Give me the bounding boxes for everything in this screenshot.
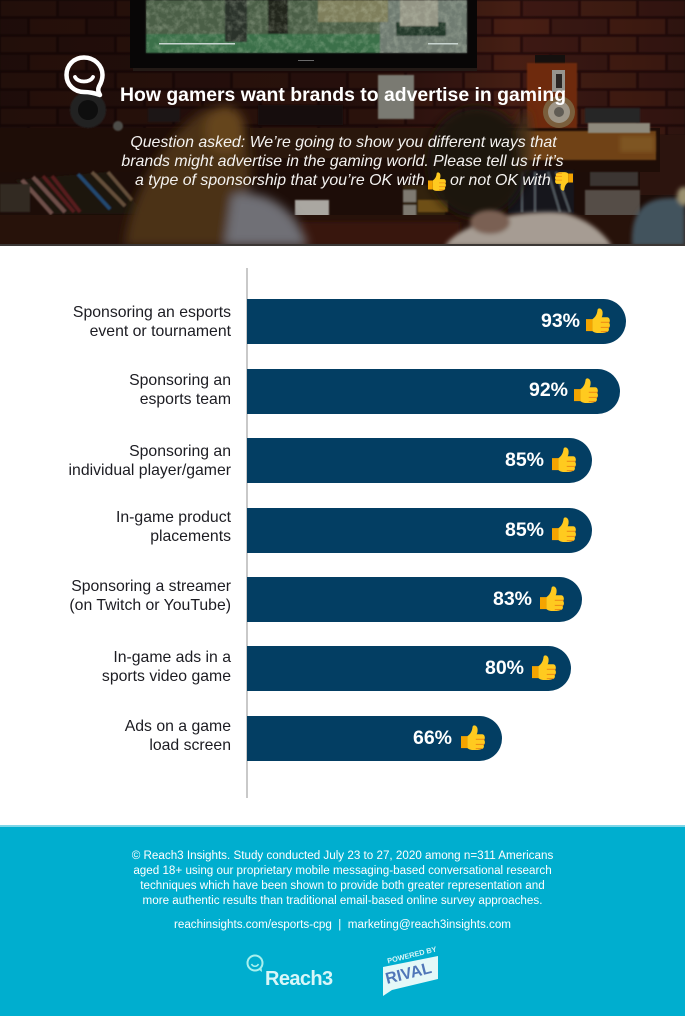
- row 3 bar: 85%: [505, 449, 544, 471]
- row 4 bar: [247, 508, 592, 553]
- tv: [130, 0, 477, 68]
- row 7 label: load screen: [149, 737, 231, 754]
- stuff on shelf: [148, 108, 180, 122]
- row 1 label: [73, 304, 231, 340]
- row 3 label: [69, 443, 231, 479]
- row 3 bar: [247, 438, 592, 483]
- picture on the wall: [378, 75, 414, 119]
- logo: Reach3: Reach3: [265, 968, 333, 990]
- row 7 bar: [247, 716, 502, 761]
- icon: thumbs up in question: [428, 172, 446, 191]
- row 6 label: In-game ads in a: [113, 649, 231, 666]
- logo: Reach3 speech bubble: [64, 55, 105, 98]
- header photo: gamers in front of a TV: [0, 0, 685, 246]
- study note: more authentic results than traditional email-based online survey approaches.: [143, 894, 542, 907]
- row 6 label: sports video game: [102, 668, 231, 685]
- question text: [121, 134, 564, 189]
- row 7 bar: 66%: [413, 727, 452, 749]
- chart: approval bars: [246, 268, 248, 798]
- silver box: [295, 200, 329, 222]
- study note: aged 18+ using our proprietary mobile messaging-based conversational research: [133, 864, 552, 877]
- row 6 bar: [247, 646, 571, 691]
- row 4 label: placements: [150, 528, 231, 545]
- footer panel: [0, 825, 685, 1016]
- logo: Powered by Rival: RIVAL: [384, 960, 434, 988]
- row 2 label: esports team: [140, 391, 231, 408]
- row 2 label: [129, 372, 231, 408]
- electronics box: [403, 185, 445, 222]
- books right: [508, 170, 574, 213]
- row 5 label: (on Twitch or YouTube): [69, 597, 231, 614]
- axis line: [246, 268, 248, 798]
- logo: Reach3: [246, 954, 333, 990]
- left speaker: [70, 92, 106, 128]
- row 4 bar: 85%: [505, 519, 544, 541]
- question text: or not OK with: [450, 172, 551, 189]
- row 1 bar: [247, 299, 626, 344]
- row 4 label: [116, 509, 231, 545]
- title: How gamers want brands to advertise in gaming: [120, 84, 566, 106]
- books left: [0, 170, 640, 222]
- row 5 label: Sponsoring a streamer: [71, 578, 231, 595]
- row 5 label: [69, 578, 231, 614]
- logo: Powered by Rival: [383, 944, 438, 996]
- logo: Powered by Rival: POWERED BY: [386, 944, 438, 965]
- contact links: reachinsights.com/esports-cpg | marketing@reach3insights.com: [174, 918, 511, 931]
- row 1 bar: 93%: [541, 310, 580, 332]
- row 4 label: In-game product: [116, 509, 231, 526]
- icon: thumbs down in question: [555, 172, 573, 191]
- row 2 bar: [247, 369, 620, 414]
- row 3 label: individual player/gamer: [69, 462, 231, 479]
- study note: [132, 849, 553, 907]
- row 1 label: Sponsoring an esports: [73, 304, 231, 321]
- question text: brands might advertise in the gaming world. Please tell us if it’s: [121, 153, 564, 170]
- row 5 bar: [247, 577, 582, 622]
- table: [0, 215, 685, 246]
- people: [125, 106, 531, 246]
- row 2 bar: 92%: [529, 379, 568, 401]
- study note: techniques which have been shown to provide both greater representation and: [140, 879, 545, 892]
- question text: a type of sponsorship that you’re OK with: [135, 172, 425, 189]
- row 6 bar: 80%: [485, 657, 524, 679]
- right speaker: [535, 55, 565, 64]
- row 7 label: Ads on a game: [125, 718, 231, 735]
- row 5 bar: 83%: [493, 588, 532, 610]
- question text: Question asked: We’re going to show you different ways that: [130, 134, 557, 151]
- row 6 label: [102, 649, 232, 685]
- row 1 label: event or tournament: [90, 323, 231, 340]
- shelf: [0, 128, 660, 172]
- study note: © Reach3 Insights. Study conducted July 23 to 27, 2020 among n=311 Americans: [132, 849, 553, 862]
- row 3 label: Sponsoring an: [129, 443, 231, 460]
- row 2 label: Sponsoring an: [129, 372, 231, 389]
- row 7 label: [124, 718, 231, 754]
